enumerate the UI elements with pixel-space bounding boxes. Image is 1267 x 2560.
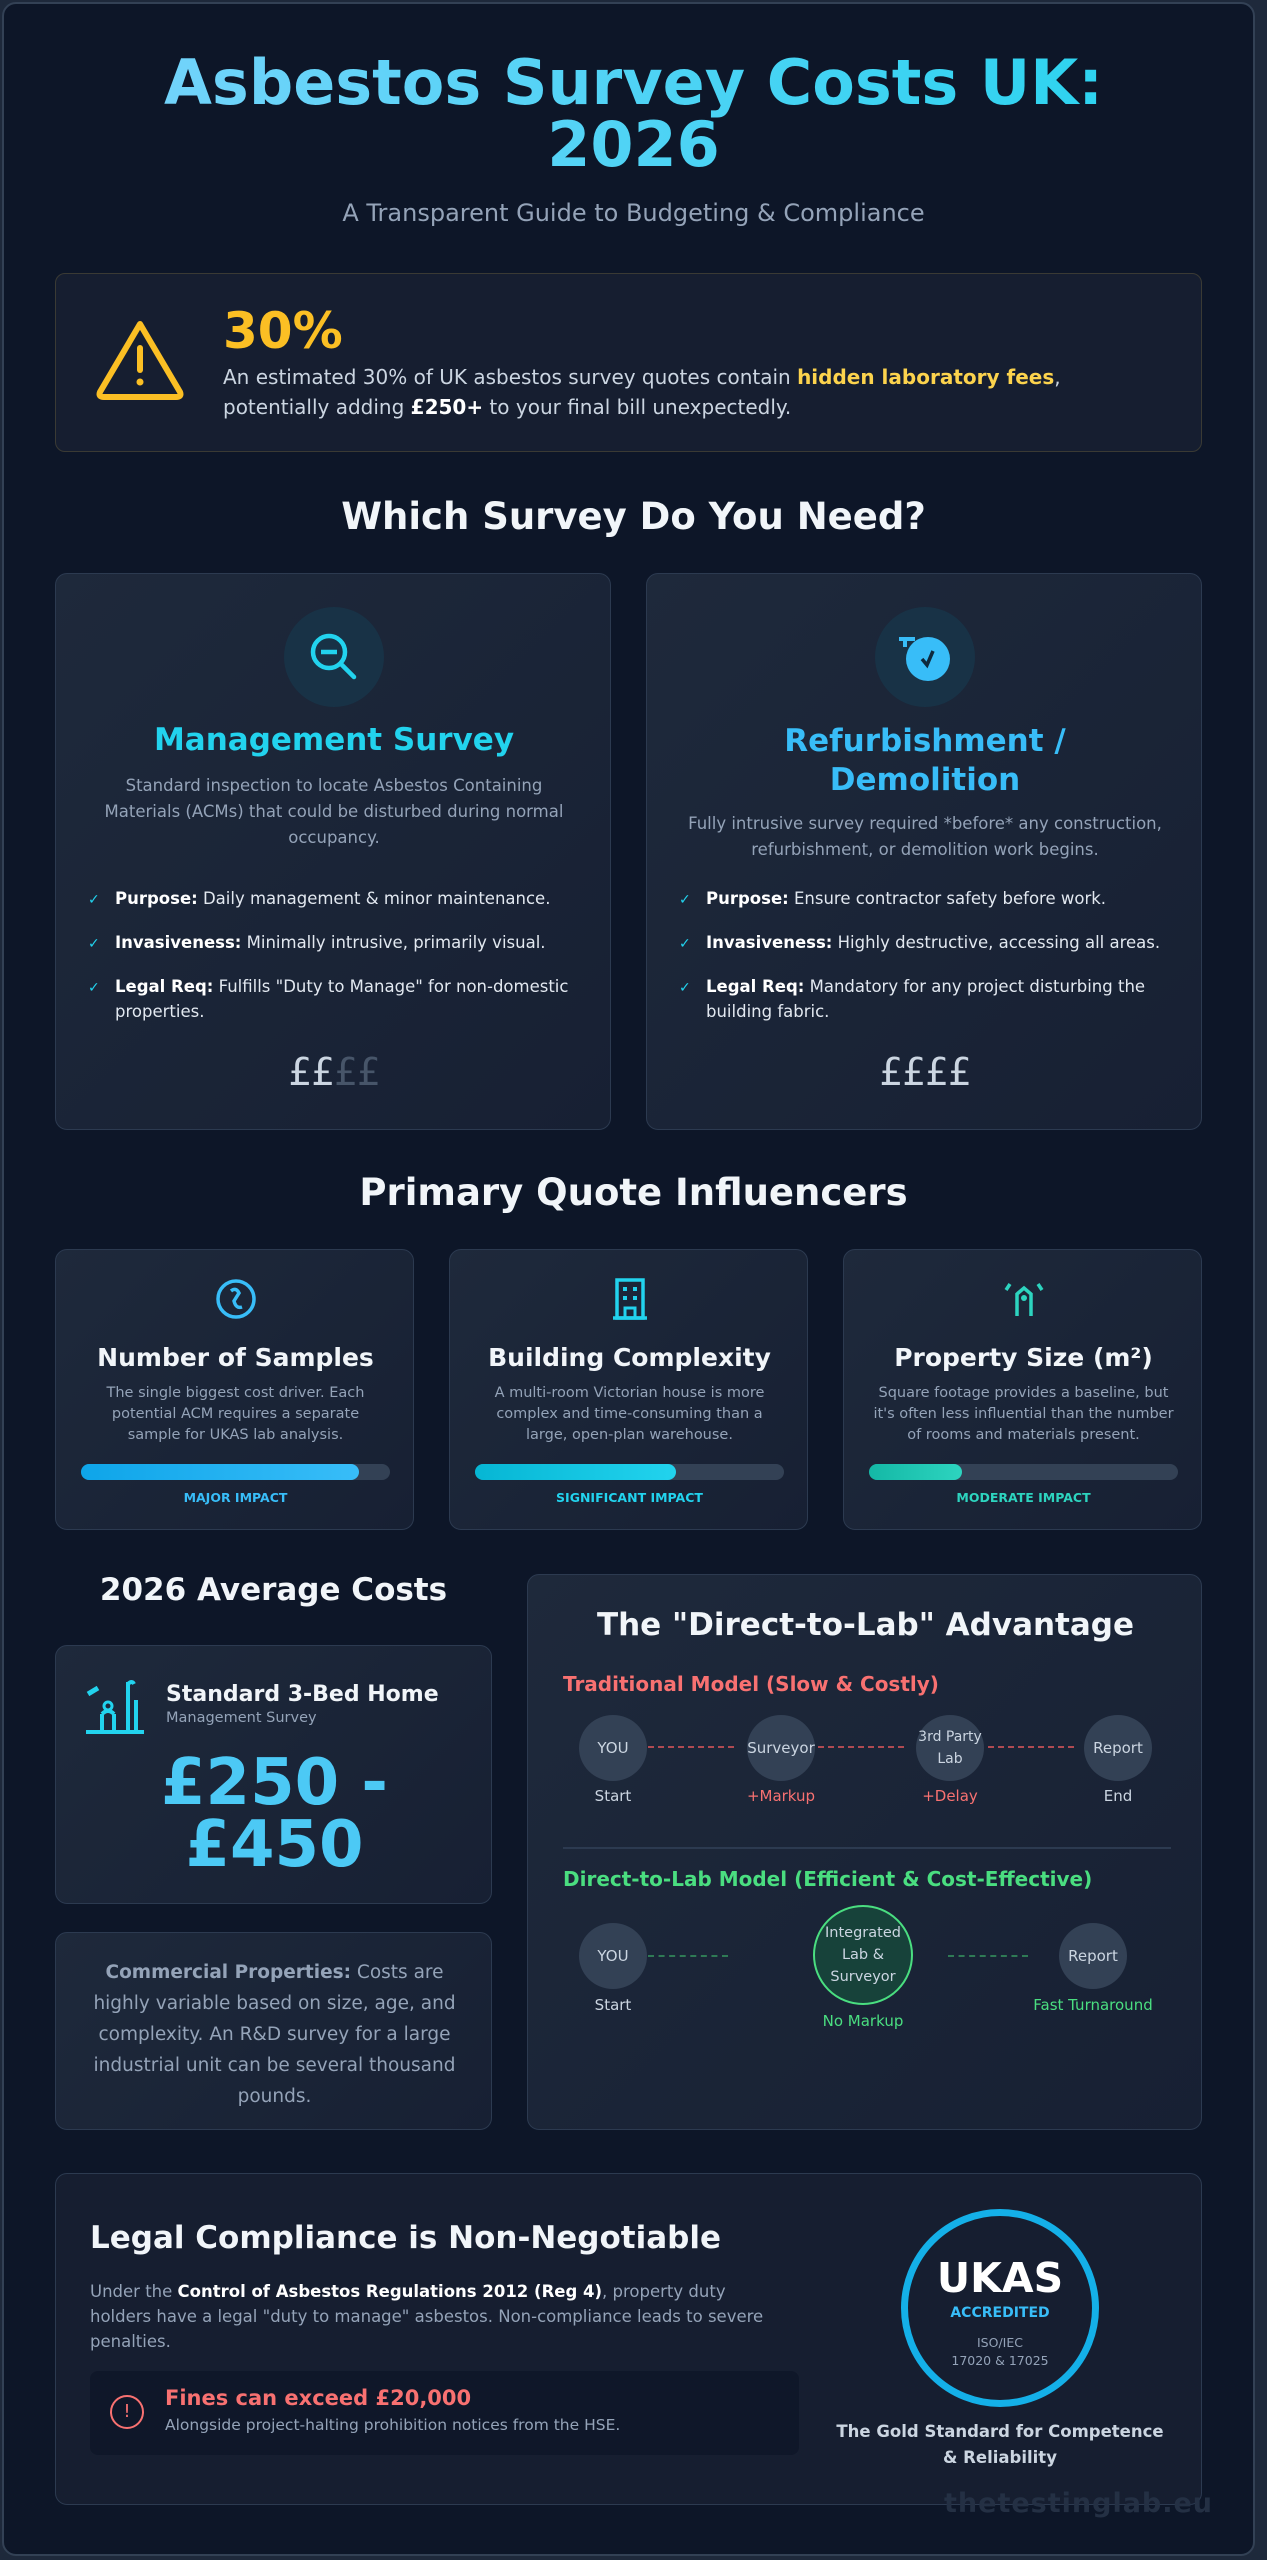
- direct flow: Integrated: [825, 1925, 901, 1941]
- traditional flow: [579, 1715, 1152, 1805]
- impact label: MAJOR IMPACT: [184, 1490, 287, 1505]
- bullet list: Invasiveness: Highly destructive, accessing all areas.: [706, 933, 1160, 952]
- bullet list: ✓: [679, 980, 691, 996]
- home subtitle: Management Survey: [166, 1710, 317, 1726]
- description: A multi-room Victorian house is more complex and time-consuming than a large, open-plan warehouse.: [495, 1385, 764, 1443]
- subtitle: A Transparent Guide to Budgeting & Compliance: [342, 199, 925, 227]
- UKAS badge: [901, 2209, 1099, 2407]
- description: Standard inspection to locate Asbestos Containing Materials (ACMs) that could be disturbed during normal occupancy.: [105, 776, 563, 847]
- direct flow: YOU: [597, 1947, 629, 1965]
- title: 2026: [547, 108, 720, 181]
- traditional flow: Surveyor: [747, 1739, 815, 1757]
- heading: which survey: Which Survey Do You Need?: [341, 495, 926, 538]
- icon: home: [86, 1680, 144, 1734]
- impact label: MODERATE IMPACT: [956, 1490, 1091, 1505]
- legal paragraph: Under the Control of Asbestos Regulations 2012 (Reg 4), property duty holders have a legal "duty to manage" asbestos. Non-compliance leads to severe penalties.: [90, 2282, 763, 2351]
- UKAS badge: 17020 & 17025: [951, 2353, 1049, 2368]
- bullet list: ✓: [679, 892, 691, 908]
- traditional flow: End: [1104, 1787, 1132, 1805]
- panel title: The "Direct-to-Lab" Advantage: [597, 1607, 1134, 1643]
- fines callout: Alongside project-halting prohibition notices from the HSE.: [165, 2416, 620, 2434]
- direct flow: Lab &: [842, 1947, 884, 1963]
- panel: property size: [843, 1249, 1202, 1530]
- traditional flow: Start: [595, 1787, 631, 1805]
- heading: average costs: 2026 Average Costs: [100, 1572, 447, 1608]
- impact bar: [81, 1464, 390, 1480]
- card title: [784, 723, 1066, 798]
- price: [161, 1746, 388, 1882]
- cost rating: ££££: [879, 1050, 971, 1094]
- direct flow: Start: [595, 1996, 631, 2014]
- bullet list: [679, 889, 1160, 1021]
- impact bar: [475, 1464, 784, 1480]
- traditional flow: 3rd Party: [918, 1729, 982, 1745]
- icon: sample: [216, 1279, 256, 1319]
- card title: Demolition: [830, 762, 1020, 798]
- badge caption: The Gold Standard for Competence & Reliability: [836, 2422, 1164, 2467]
- description: Fully intrusive survey required *before* any construction, refurbishment, or demolition work begins.: [688, 814, 1162, 859]
- title: Property Size (m²): [894, 1343, 1153, 1372]
- UKAS badge: UKAS: [937, 2254, 1063, 2302]
- description: The single biggest cost driver. Each potential ACM requires a separate sample for UKAS lab analysis.: [106, 1385, 364, 1443]
- bullet list: ✓: [679, 936, 691, 952]
- legal heading: Legal Compliance is Non-Negotiable: [90, 2220, 721, 2256]
- traditional flow: Report: [1093, 1739, 1143, 1757]
- icon: magnifier: [284, 607, 384, 707]
- traditional flow: YOU: [597, 1739, 629, 1757]
- UKAS badge: ISO/IEC: [977, 2335, 1023, 2350]
- alert text: An estimated 30% of UK asbestos survey quotes contain hidden laboratory fees, potentially adding £250+ to your final bill unexpectedly.: [223, 365, 1061, 419]
- direct flow: Report: [1068, 1947, 1118, 1965]
- icon: area: [1004, 1283, 1044, 1316]
- panel: commercial properties: [55, 1932, 492, 2130]
- panel: 3-bed home cost: [55, 1645, 492, 1904]
- title: [0, 52, 1267, 176]
- UKAS badge: ACCREDITED: [950, 2305, 1050, 2321]
- bullet list: Legal Req: Mandatory for any project disturbing the building fabric.: [706, 977, 1145, 1021]
- bullet list: ✓: [88, 980, 100, 996]
- direct flow: No Markup: [823, 2012, 903, 2030]
- bullet list: ✓: [88, 892, 100, 908]
- panel: direct-to-lab advantage: [527, 1574, 1202, 2130]
- panel: refurbishment survey: [646, 573, 1202, 1130]
- panel: legal compliance: [55, 2173, 1202, 2505]
- traditional model heading: Traditional Model (Slow & Costly): [563, 1672, 939, 1696]
- icon: check badge: [875, 607, 975, 707]
- panel: management survey: [55, 573, 611, 1130]
- bullet list: [88, 889, 568, 1021]
- panel: building complexity: [449, 1249, 808, 1530]
- watermark: thetestinglab.eu: [944, 2488, 1213, 2519]
- bullet list: ✓: [88, 936, 100, 952]
- icon: building: [613, 1278, 647, 1320]
- stat 30%: 30%: [223, 302, 343, 360]
- heading: influencers: Primary Quote Influencers: [359, 1171, 908, 1214]
- bullet list: Invasiveness: Minimally intrusive, primarily visual.: [115, 933, 546, 952]
- bullet list: Purpose: Daily management & minor maintenance.: [115, 889, 550, 908]
- direct model heading: Direct-to-Lab Model (Efficient & Cost-Effective): [563, 1867, 1092, 1891]
- bullet list: Purpose: Ensure contractor safety before work.: [706, 889, 1106, 908]
- direct flow: Fast Turnaround: [1033, 1996, 1153, 2014]
- description: Square footage provides a baseline, but it's often less influential than the number of rooms and materials present.: [873, 1385, 1174, 1443]
- title: Building Complexity: [488, 1343, 771, 1372]
- impact label: SIGNIFICANT IMPACT: [556, 1490, 703, 1505]
- fines callout: [90, 2371, 799, 2455]
- alert panel: [55, 273, 1202, 452]
- price: £450: [185, 1808, 364, 1882]
- bullet list: Legal Req: Fulfills "Duty to Manage" for non-domestic properties.: [115, 977, 568, 1021]
- icon: warning triangle: [96, 321, 184, 400]
- fines callout: Fines can exceed £20,000: [165, 2386, 471, 2410]
- traditional flow: +Delay: [922, 1787, 978, 1805]
- impact bar: [869, 1464, 1178, 1480]
- direct flow: Surveyor: [830, 1969, 896, 1985]
- title: Asbestos Survey Costs UK:: [164, 46, 1103, 119]
- panel: commercial properties: Commercial Properties: Costs are highly variable based on size, age, and complexity. An R&D survey for a large industrial unit can be several thousand pounds.: [93, 1962, 456, 2107]
- price: £250 -: [161, 1746, 388, 1820]
- icon: exclamation: !: [123, 2401, 131, 2422]
- title: Number of Samples: [97, 1343, 374, 1372]
- direct flow: [579, 1905, 1153, 2030]
- home title: Standard 3-Bed Home: [166, 1682, 439, 1707]
- traditional flow: +Markup: [747, 1787, 815, 1805]
- cost rating: ££££: [288, 1050, 380, 1094]
- icon: exclamation: [110, 2395, 144, 2429]
- panel: number of samples: [55, 1249, 414, 1530]
- card title: Management Survey: [154, 722, 514, 758]
- traditional flow: Lab: [937, 1751, 963, 1767]
- card title: Refurbishment /: [784, 723, 1066, 759]
